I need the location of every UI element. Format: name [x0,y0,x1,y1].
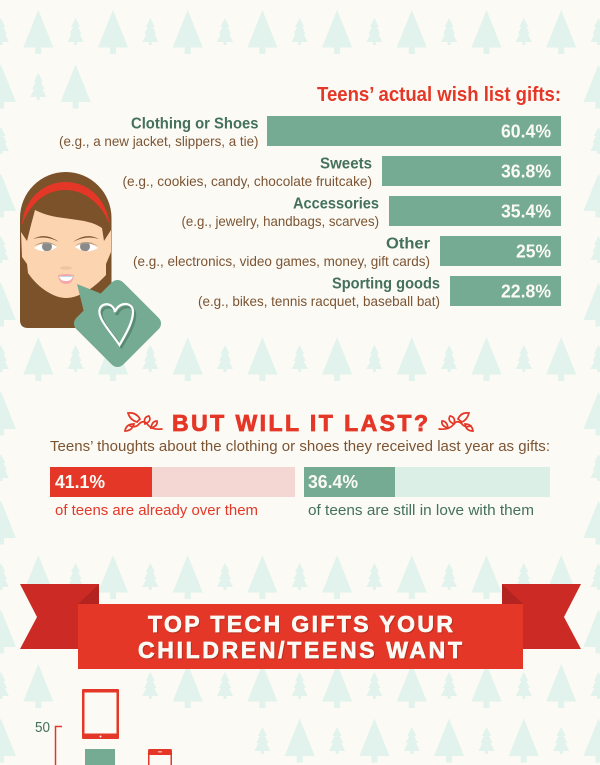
chart: top tech gifts [35,689,172,765]
subheading: thoughts about clothing: Teens’ thoughts about the clothing or shoes they received last year as gifts: [50,438,550,455]
stat bar: over them: of teens are already over them [55,502,258,519]
bar row: sporting goods: Sporting goods [332,276,440,292]
bar row: sporting goods: 22.8% [501,282,551,302]
stat bar: still in love [304,467,550,519]
bar: tablet [85,749,115,765]
icon: smartphone [148,749,172,765]
hair [20,172,112,328]
bar row: other: (e.g., electronics, video games, money, gift cards) [133,253,430,269]
illustration: teen girl face [20,172,112,328]
stat bar: over them [50,467,295,519]
bar row: accessories: Accessories [293,196,379,212]
bar row: other: 25% [516,242,551,262]
ribbon banner [20,584,581,669]
bar row: clothing or shoes: (e.g., a new jacket, slippers, a tie) [59,133,258,149]
bar row: accessories: 35.4% [501,202,551,222]
bar row: accessories: (e.g., jewelry, handbags, scarves) [182,213,379,229]
bar row: sporting goods: (e.g., bikes, tennis racquet, baseball bat) [198,293,440,309]
bar row: sweets: 36.8% [501,162,551,182]
headband [22,182,110,225]
face [21,210,111,298]
banner title [138,611,462,663]
speech bubble with heart [77,284,153,359]
bar row: sweets: Sweets [320,156,372,172]
bar row: sweets: (e.g., cookies, candy, chocolate fruitcake) [122,173,372,189]
stat bar: over them: 41.1% [55,472,105,492]
stat bar: still in love: 36.4% [308,472,358,492]
icon: heart [99,304,133,345]
heading: teens' actual wish list gifts: Teens’ actual wish list gifts: [317,83,561,106]
bar row: other [133,236,561,269]
icon: tablet [82,689,119,739]
icon: heart shadow [101,307,135,347]
stat bar: still in love: of teens are still in love with them [308,502,534,519]
bar row: other: Other [386,236,430,252]
bar row: sweets [122,156,561,189]
heading: but will it last: BUT WILL IT LAST? [172,410,428,436]
nose [60,266,72,270]
left eye [33,236,59,252]
bar row: clothing or shoes [59,116,561,149]
axis label 50: 50 [35,720,50,736]
axis [56,726,62,765]
bar row: clothing or shoes: Clothing or Shoes [131,116,259,132]
bar row: clothing or shoes: 60.4% [501,122,551,142]
icon: left holly sprig [125,413,162,431]
banner title: TOP TECH GIFTS YOUR [148,611,453,637]
bar chart: wish list gifts [59,116,561,309]
mouth [58,274,74,284]
banner title: CHILDREN/TEENS WANT [138,637,462,663]
bar row: sporting goods [198,276,561,309]
right eye [73,236,99,252]
bar row: accessories [182,196,561,229]
icon: right holly sprig [439,413,473,431]
